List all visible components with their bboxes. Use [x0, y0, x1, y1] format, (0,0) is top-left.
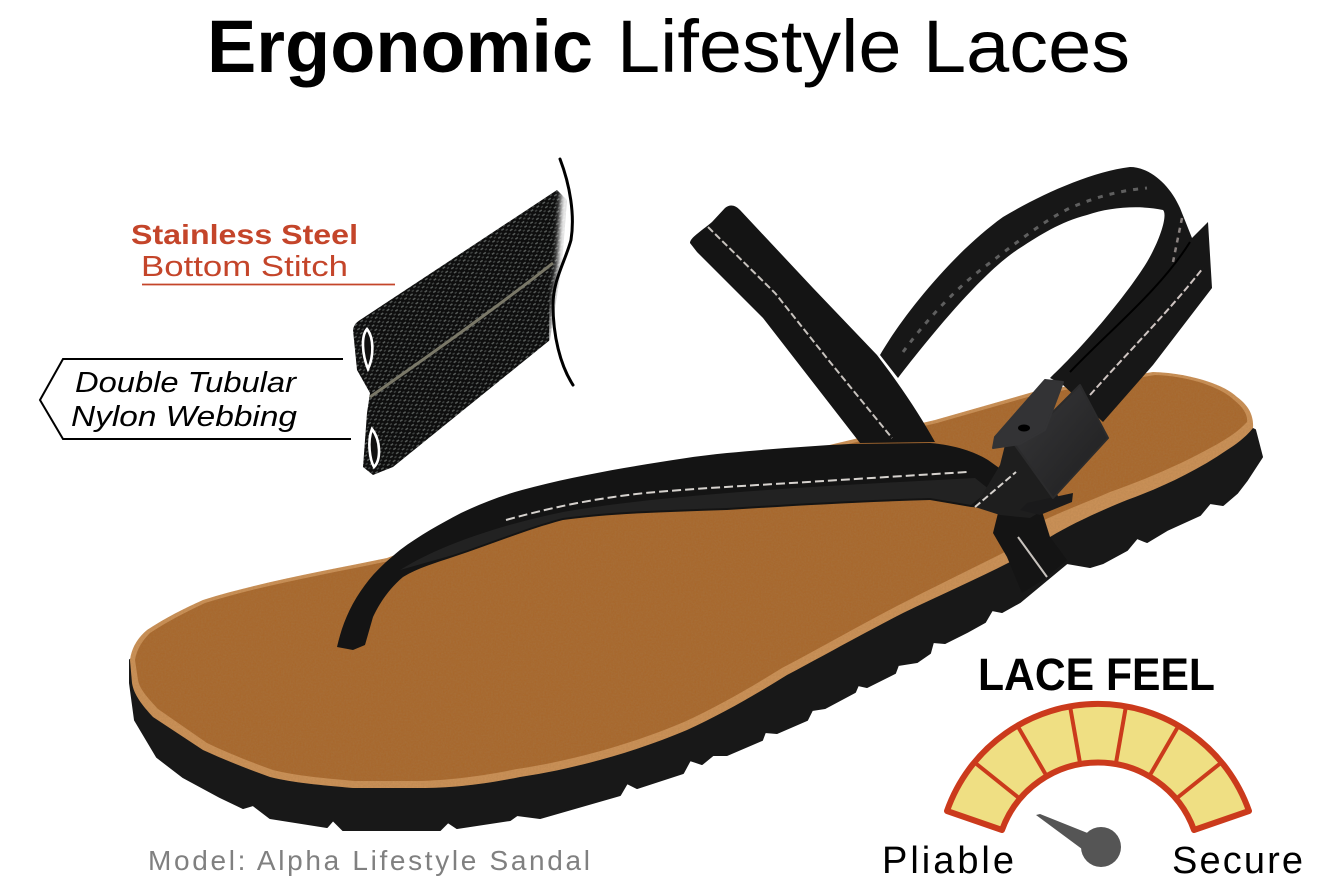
buckle body	[1015, 385, 1108, 498]
buckle	[993, 380, 1108, 515]
title: Lifestyle Laces	[617, 5, 1130, 88]
heel strap	[880, 167, 1212, 422]
lower wrap stitching	[1018, 537, 1047, 577]
sandal illustration	[130, 167, 1262, 830]
upper tube opening	[363, 329, 372, 369]
buckle hole	[1018, 424, 1030, 432]
rear strap	[690, 206, 935, 443]
knot	[975, 440, 1060, 518]
model caption: Model: Alpha Lifestyle Sandal	[148, 845, 590, 876]
callout: stainless steel bottom stitch: Stainless Steel	[131, 219, 358, 250]
title	[207, 5, 1130, 88]
callout: double tubular nylon webbing: Double Tubular	[75, 367, 298, 399]
gauge label: pliable: Pliable	[882, 840, 1014, 882]
footbed	[130, 372, 1253, 788]
swatch soft edge	[552, 190, 566, 345]
lower tube opening	[369, 429, 379, 467]
rear strap stitching	[708, 227, 892, 438]
gauge needle	[1036, 814, 1121, 867]
title: Ergonomic	[207, 5, 593, 88]
thong lace	[337, 443, 1020, 650]
webbing cross-section detail	[353, 159, 573, 475]
webbing swatch	[353, 190, 567, 475]
thong lace lower tube	[400, 478, 990, 570]
gauge label: secure: Secure	[1172, 840, 1303, 882]
callout: double tubular nylon webbing: Nylon Webbing	[71, 401, 297, 433]
lace feel gauge	[882, 649, 1303, 882]
sole	[130, 390, 1262, 830]
thong lace stitching	[506, 472, 967, 520]
callout: stainless steel bottom stitch: Bottom Stitch	[141, 251, 348, 283]
buckle bottom clip	[1020, 493, 1073, 515]
buckle top wedge	[993, 380, 1063, 448]
callout: double tubular nylon webbing	[40, 359, 351, 439]
webbing centre stitch	[370, 263, 553, 397]
gauge heading: LACE FEEL	[978, 649, 1215, 700]
gauge arc	[947, 704, 1249, 830]
callout: stainless steel bottom stitch	[131, 219, 395, 284]
knot stitching	[975, 472, 1016, 507]
heel strap divider	[1070, 242, 1190, 372]
heel strap stitching	[903, 188, 1147, 352]
lower wrap	[993, 505, 1067, 593]
curved cut line	[553, 159, 573, 385]
